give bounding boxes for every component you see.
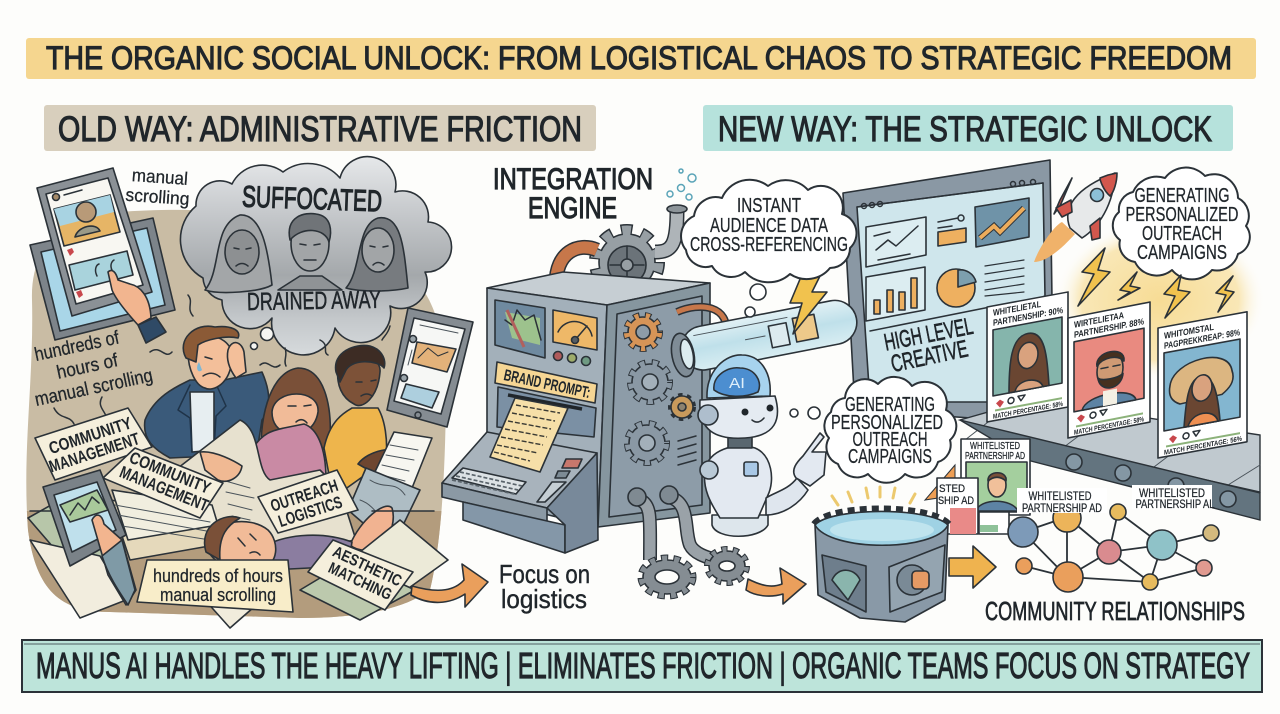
label: high level creative [882,313,975,378]
tablet behind phone [30,218,175,340]
cloud: generating outreach center: OUTREACH [852,429,928,451]
pie chart widget [937,269,976,307]
AI robot [698,355,826,536]
partnership card 1: WHITELIETAL [993,299,1041,318]
glow behind cards [1055,220,1265,380]
panel: old way chaos scene [24,157,473,628]
crumpled paper pile [170,420,356,560]
tan background blob [26,210,446,618]
integration engine machine [442,169,746,595]
side gears [627,316,696,465]
bar chart widget [866,267,925,321]
sign: community management 1: MANAGEMENT [47,429,142,476]
label: manual scrolling: scrolling [125,185,190,209]
monitor dashboard [843,160,1052,420]
label: hundreds of hours: hundreds of [33,327,122,366]
heading: old way: OLD WAY: ADMINISTRATIVE FRICTION [58,110,582,149]
arrow: gears to engine core [746,568,806,604]
sign: outreach logistics: OUTREACH [268,476,341,516]
glass data tube [668,297,861,379]
thought bubbles [250,328,274,350]
whitelisted ad card with portrait: WHITELISTED [970,441,1020,452]
cloud: generating outreach center [824,377,956,483]
notepad right [372,432,432,493]
label: hundreds of hours: hours of [55,350,120,384]
label: whitelisted ad right: PARTNERSHIP AL [1136,497,1215,511]
top gear [596,231,658,293]
whitelisted ad card partial: SHIP AD [938,495,974,507]
label: whitelisted ad right: WHITELISTED [1139,486,1205,500]
label: hundreds of hours [24,322,155,411]
label: high level creative: CREATIVE [888,335,970,378]
sign: aesthetic matching [308,540,413,610]
robot thought dots [790,407,820,419]
cloud: generating outreach center: CAMPAIGNS [848,446,932,468]
sign: community management 1 [35,408,152,480]
heading: integration engine [493,163,653,225]
sign: aesthetic matching: AESTHETIC [330,544,404,590]
person: worried colleague [324,345,401,490]
orange trend widget [975,198,1029,247]
sign: aesthetic matching: MATCHING [325,560,394,604]
cloud: generating outreach right: GENERATING [1134,185,1230,207]
steel exhaust pipe [655,205,687,252]
label: whitelisted ad right [1132,485,1215,511]
sketch map tablet [348,468,420,550]
partnership card 1: MATCH PERCENTAGE: 58% [993,401,1064,421]
whitelisted ad card with portrait: PARTNERSHIP AD [965,451,1025,462]
printed paper [490,398,568,472]
thought cloud: suffocated: SUFFOCATED [241,181,383,218]
sign: community management 1: COMMUNITY [46,413,135,458]
lightning bolt [790,272,827,334]
exhaust bubbles [667,169,696,200]
whitelisted ad card with portrait [961,439,1030,515]
partnership card 2: MATCH PERCENTAGE: 58% [1074,416,1145,437]
label: manual scrolling [125,165,192,209]
cloud: audience data: INSTANT [737,195,801,217]
tablet with creative feed [387,308,473,427]
cloud: audience data: AUDIENCE DATA [710,215,828,237]
sign: hundreds of hours [137,560,293,612]
sad face woman [346,218,408,291]
line chart widget [866,217,926,267]
sign: hundreds of hours: hundreds of hours [153,566,283,586]
cloud: generating outreach right: OUTREACH [1142,223,1222,245]
copper side pipe [677,307,726,335]
sign: community management 2: MANAGEMENT [117,462,212,515]
partnership card 2: PARTNERSHIP. 88% [1074,316,1144,340]
whitelisted ad card partial: STED [939,483,965,495]
lightning bolts [1078,248,1234,318]
network nodes [1008,504,1219,592]
sign: outreach logistics [258,470,358,533]
thought cloud: suffocated [180,157,452,355]
person slumped on desk [205,517,352,570]
heading: integration engine: ENGINE [528,192,617,225]
network graph: community relationships [1008,504,1219,592]
brand prompt label [495,362,597,403]
sad face in hijab [205,215,272,292]
console [442,432,598,553]
arrow: core to network [949,546,996,588]
engine core with water [815,487,948,622]
copper pipe [546,247,597,288]
arrow: old way to logistics [411,564,488,607]
cloud: audience data: CROSS-REFERENCING [690,234,848,256]
partnership card 1 [987,292,1068,422]
bottom gears [642,550,746,595]
cloud: generating outreach right: PERSONALIZED [1126,204,1238,226]
stress squiggles [54,295,390,424]
person: stressed man [145,326,269,458]
hand tapping [108,270,151,325]
label: focus on logistics: Focus on [499,559,590,589]
label: whitelisted ad center: PARTNERSHIP AD [1022,501,1102,515]
chart display [495,300,545,358]
label: focus on logistics [499,559,590,614]
sign: hundreds of hours: manual scrolling [160,585,276,605]
list widget [985,260,1024,296]
heading: integration engine: INTEGRATION [493,163,653,196]
partnership card 1: PARTNENSHIP: 90% [993,305,1063,328]
cloud: generating outreach right [1113,168,1250,279]
AI robot: AI [729,375,745,392]
label: focus on logistics: logistics [501,584,587,614]
sign: community management 2 [103,448,223,518]
machine cabinet [487,272,710,305]
paper slot panel [497,387,596,437]
indicator lights [554,352,590,366]
toggle widget [938,215,966,246]
label: hundreds of hours: manual scrolling [33,365,155,411]
partnership card 3 [1158,312,1247,458]
gauge display [553,310,597,350]
thought cloud: suffocated: DRAINED AWAY [247,286,381,316]
partnership card 3: WHITOMSTAL [1164,322,1214,341]
lower pipes [628,486,722,562]
bubbles to data cloud [745,284,766,317]
sign: community management 2: COMMUNITY [127,448,214,498]
brand prompt label: BRAND PROMPT: [502,367,592,402]
label: manual scrolling: manual [131,165,189,189]
cloud: generating outreach center: PERSONALIZED [831,412,943,434]
conveyor belt [960,400,1260,520]
whitelisted ad card partial [925,465,1009,534]
cloud: generating outreach center: GENERATING [845,394,935,416]
sad face man [278,214,342,290]
tablet on desk with chart [43,470,136,605]
cloud: generating outreach right: CAMPAIGNS [1137,242,1227,264]
partnership card 2 [1068,302,1150,438]
glow rays [832,487,915,505]
cloud: audience data [681,180,857,282]
partnership card 3: PAGPREKKREAP: 98% [1164,327,1240,351]
label: whitelisted ad center: WHITELISTED [1028,489,1092,503]
rocket [1034,173,1117,262]
phone with manual scrolling feed [37,168,166,343]
sign: outreach logistics: LOGISTICS [276,493,345,531]
partnership card 3: MATCH PERCENTAGE: 56% [1164,436,1243,457]
desk papers [28,490,448,628]
partnership card 2: WIRTELIETAA [1074,310,1124,330]
label: high level creative: HIGH LEVEL [882,313,975,356]
label: whitelisted ad center [1017,488,1107,515]
person: tired woman [252,368,330,490]
